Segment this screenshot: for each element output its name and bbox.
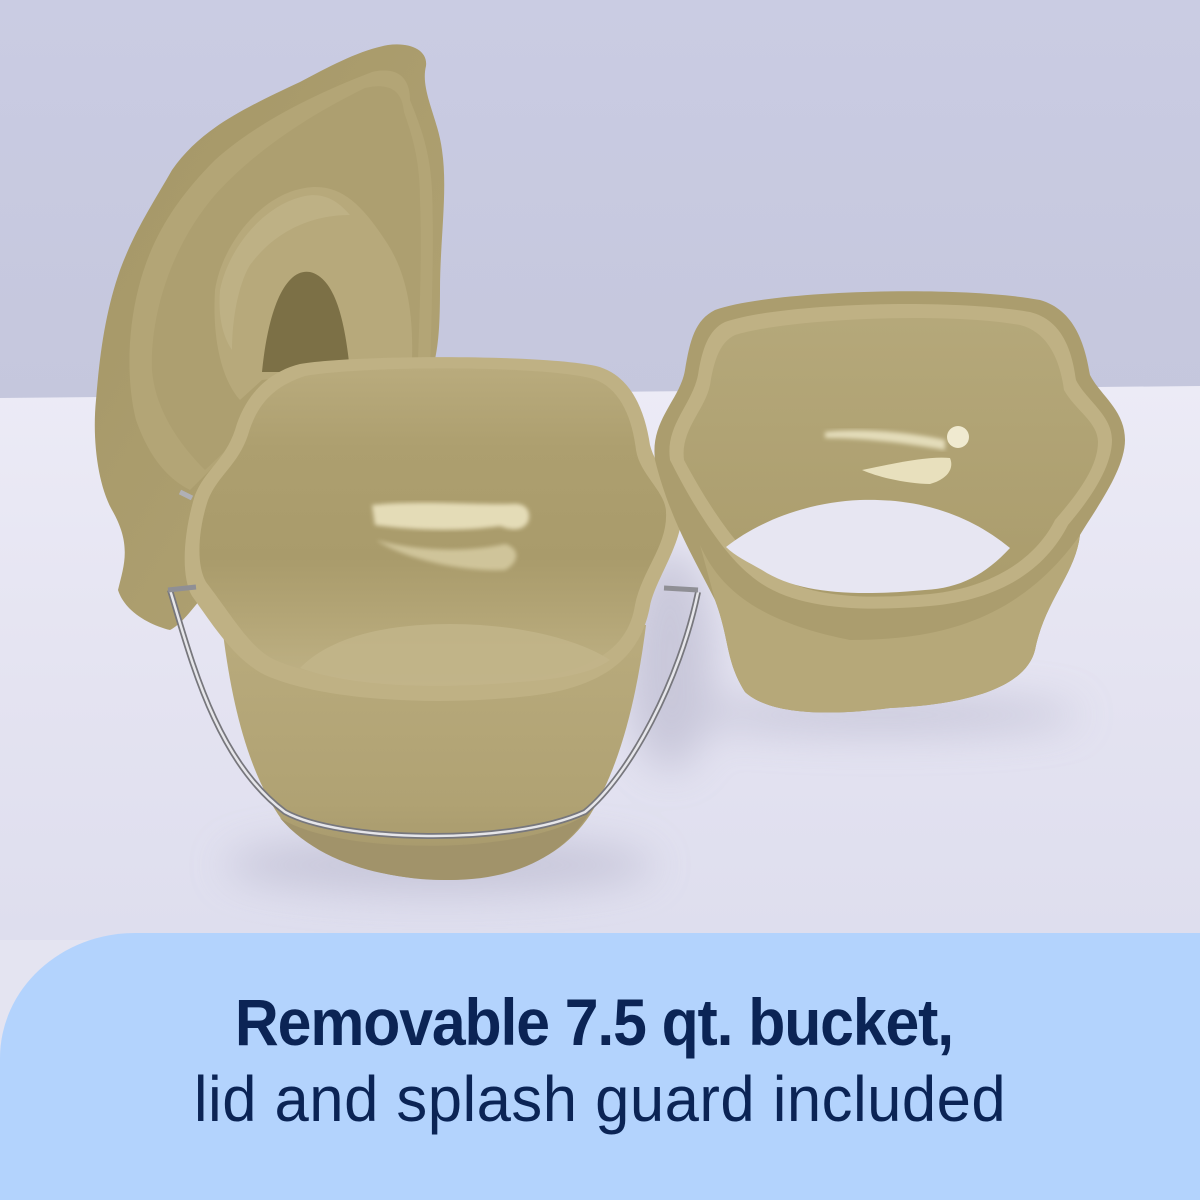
- bucket rim: [185, 357, 682, 701]
- splash guard opening: [726, 500, 1010, 593]
- shadows on table: [225, 550, 1080, 893]
- wall background: [0, 0, 1200, 400]
- bucket outer body: [222, 625, 646, 880]
- lid handle highlight: [220, 195, 350, 350]
- lid handle: [214, 187, 412, 400]
- splash guard inner: [684, 318, 1098, 597]
- splash guard rim: [669, 304, 1112, 609]
- caption banner: [0, 933, 1200, 1200]
- bucket body base: [280, 812, 590, 880]
- lid handle opening: [262, 272, 350, 372]
- lid inner tray step: [152, 86, 421, 470]
- heading: Removable 7.5 qt. bucket,: [235, 985, 953, 1059]
- subheading: lid and splash guard included: [194, 1063, 1006, 1135]
- splash guard reflections: [825, 430, 945, 450]
- bucket inner reflections: [372, 503, 529, 570]
- handle wire: [168, 492, 698, 836]
- lid inner tray: [129, 70, 433, 490]
- table surface: [0, 386, 1200, 940]
- splash guard outer lower band: [700, 535, 1080, 713]
- bucket inner: [199, 368, 666, 685]
- bucket inner floor: [300, 624, 610, 686]
- splash guard: [654, 291, 1125, 713]
- lid: [95, 44, 444, 630]
